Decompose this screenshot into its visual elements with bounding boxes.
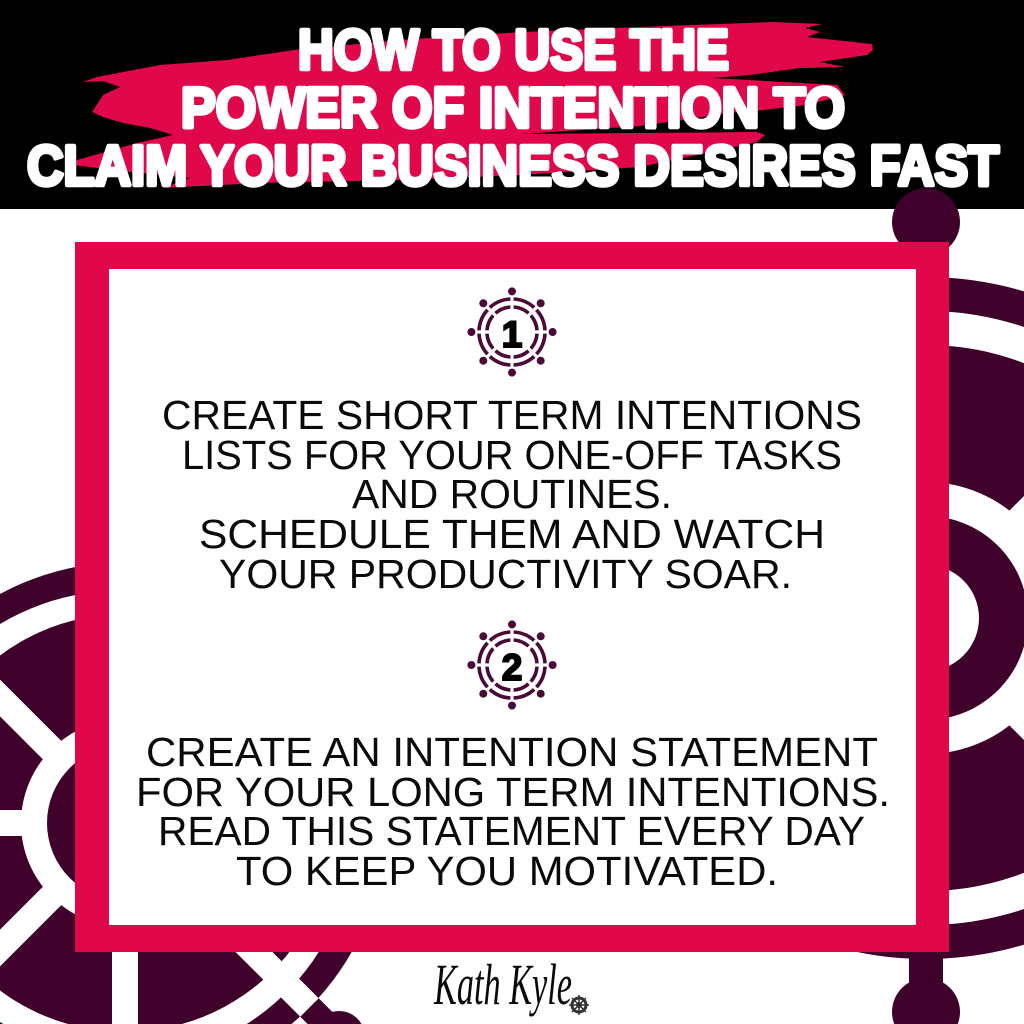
- text block: step 1: YOUR PRODUCTIVITY SOAR.: [219, 551, 792, 597]
- text block: step 2: FOR YOUR LONG TERM INTENTIONS.: [136, 769, 890, 815]
- text block: step 1: [162, 392, 862, 597]
- brush stroke behind title: [73, 22, 873, 188]
- title line 2: POWER OF INTENTION TO: [181, 76, 845, 140]
- icon: number 1 badge: [467, 287, 557, 377]
- header band: [0, 0, 1024, 209]
- icon: number 1 badge: 1: [502, 314, 522, 355]
- decorative wheel: right: [585, 188, 1024, 1024]
- panel: content frame: [75, 242, 949, 952]
- icon: signature mark: [569, 995, 589, 1015]
- signature: Kath Kyle: [433, 952, 572, 1017]
- text block: step 1: LISTS FOR YOUR ONE-OFF TASKS: [182, 432, 842, 478]
- text block: step 2: [136, 729, 890, 894]
- decorative wheel: left: [0, 562, 386, 1024]
- text block: step 1: CREATE SHORT TERM INTENTIONS: [162, 392, 862, 438]
- text block: step 1: SCHEDULE THEM AND WATCH: [199, 511, 825, 557]
- title: [27, 18, 999, 198]
- text block: step 2: CREATE AN INTENTION STATEMENT: [146, 729, 878, 775]
- text block: step 2: TO KEEP YOU MOTIVATED.: [236, 848, 778, 894]
- text block: step 1: AND ROUTINES.: [352, 471, 672, 517]
- icon: number 2 badge: 2: [502, 647, 522, 688]
- title line 1: HOW TO USE THE: [298, 18, 729, 82]
- icon: number 2 badge: [467, 620, 557, 710]
- text block: step 2: READ THIS STATEMENT EVERY DAY: [158, 808, 865, 854]
